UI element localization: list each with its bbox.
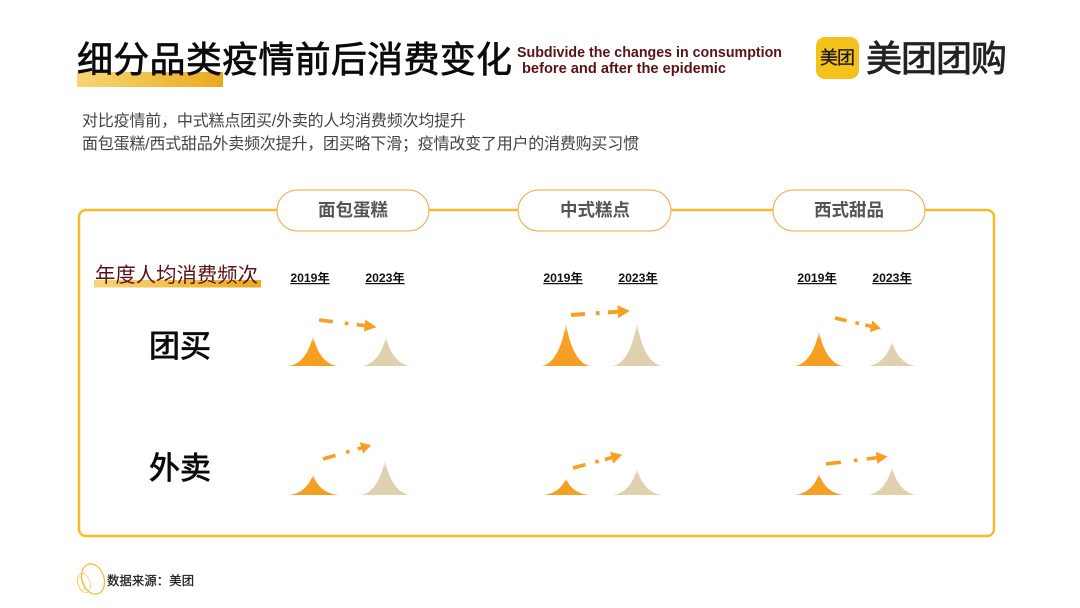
year labels: 2019年 [543, 270, 583, 285]
description text: 面包蛋糕/西式甜品外卖频次提升，团买略下滑；疫情改变了用户的消费购买习惯 [82, 135, 639, 153]
source icon [75, 561, 108, 597]
row label: 团买: 团买 [149, 329, 211, 364]
year labels: 2023年 [365, 270, 405, 285]
chart: 外卖 面包蛋糕 [288, 439, 411, 495]
year labels: 2019年 [797, 270, 837, 285]
category pill: 面包蛋糕: 面包蛋糕 [318, 200, 388, 220]
category pill: 西式甜品 [773, 190, 925, 231]
logo: Meituan group buying [816, 37, 1007, 79]
year labels [290, 270, 912, 285]
year labels: 2019年 [290, 270, 330, 285]
title highlight [77, 72, 223, 87]
logo icon: 美团 [820, 48, 855, 68]
year labels: 2023年 [872, 270, 912, 285]
description text [82, 112, 639, 153]
chart: 团买 中式糕点 [541, 304, 663, 366]
chart: 团买 面包蛋糕 [288, 314, 411, 366]
metric label: annual frequency per capita: 年度人均消费频次 [95, 264, 258, 287]
category pill: 中式糕点: 中式糕点 [560, 200, 630, 220]
year labels: 2023年 [618, 270, 658, 285]
english subtitle: Subdivide the changes in consumption [517, 45, 782, 61]
english subtitle: before and after the epidemic [522, 61, 726, 77]
panel frame [79, 210, 994, 536]
description text: 对比疫情前，中式糕点团买/外卖的人均消费频次均提升 [82, 112, 466, 130]
source text: 数据来源：美团 [107, 573, 194, 588]
title: 细分品类疫情前后消费变化 [77, 39, 512, 80]
chart: 外卖 中式糕点 [542, 449, 663, 495]
chart: 外卖 西式甜品 [794, 450, 917, 495]
row label: 外卖: 外卖 [149, 451, 211, 486]
logo icon [816, 37, 859, 79]
logo wordmark: 美团团购 [866, 38, 1007, 79]
category pill: 面包蛋糕 [277, 190, 429, 231]
category pill: 西式甜品: 西式甜品 [814, 200, 884, 220]
category pill: 中式糕点 [518, 190, 671, 231]
chart: 团买 西式甜品 [794, 312, 917, 366]
english subtitle [517, 45, 782, 77]
